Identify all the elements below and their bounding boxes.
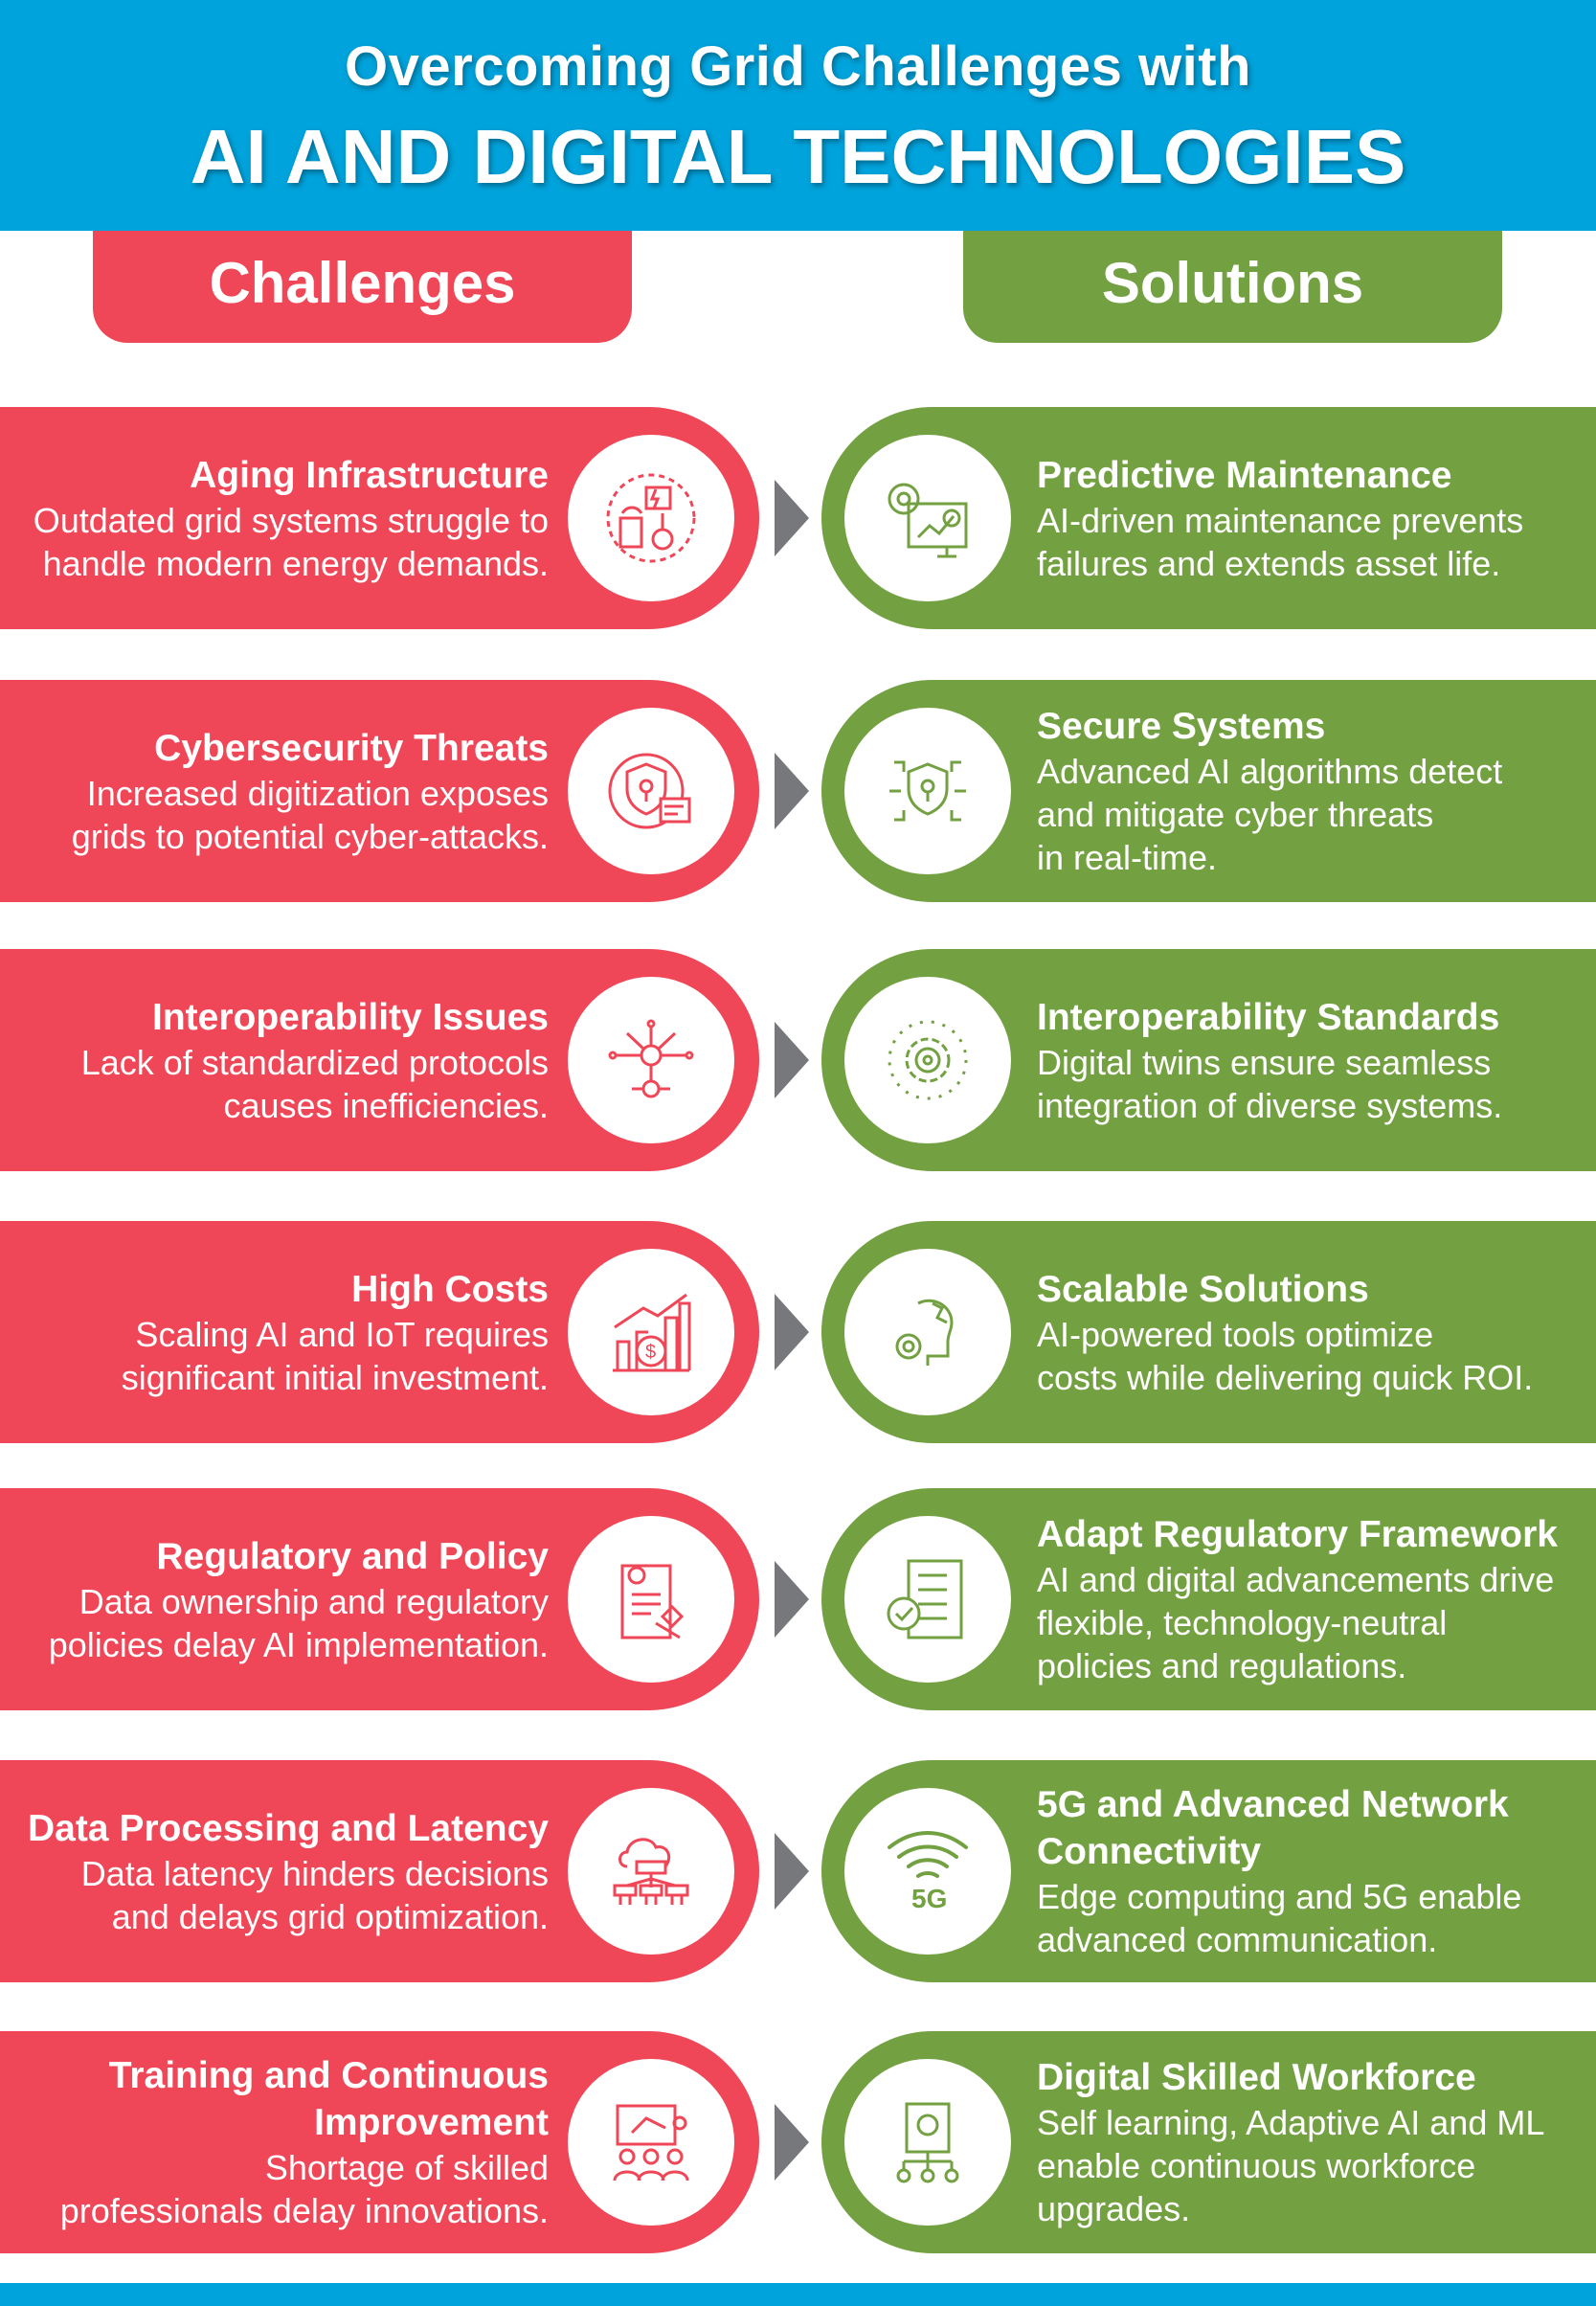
text: digital skilled workforce: Self learning, Adaptive AI and ML — [1037, 2103, 1544, 2142]
text: scalable solutions: costs while delivering quick ROI. — [1037, 1358, 1533, 1396]
text: interoperability standards: Interoperability Standards — [1037, 996, 1499, 1038]
panel: cybersecurity threats — [0, 680, 759, 902]
text: adapt regulatory framework: flexible, technology-neutral — [1037, 1603, 1447, 1642]
arrow — [775, 1022, 809, 1098]
row 4 — [0, 1221, 1596, 1443]
panel: cybersecurity threats: Cybersecurity Threats — [154, 728, 549, 768]
text: adapt regulatory framework: Adapt Regulatory Framework — [1037, 1514, 1558, 1555]
tab: solutions — [963, 231, 1502, 343]
panel: cybersecurity threats: Increased digitization exposes — [87, 774, 549, 812]
text: digital skilled workforce — [1037, 2057, 1544, 2228]
panel: aging infrastructure: Outdated grid systems struggle to — [34, 500, 549, 540]
tab: solutions: Solutions — [1102, 251, 1363, 315]
text: interoperability standards: integration of diverse systems. — [1037, 1086, 1502, 1124]
text: secure systems — [1037, 706, 1502, 877]
text: 5G connectivity: Edge computing and 5G enable — [1037, 1877, 1521, 1916]
panel: high costs: High Costs — [351, 1268, 549, 1310]
text: secure systems: in real-time. — [1037, 838, 1217, 877]
text: 5G connectivity: advanced communication. — [1037, 1920, 1437, 1959]
tab: challenges — [93, 231, 632, 343]
text: predictive maintenance: AI-driven maintenance prevents — [1037, 500, 1523, 540]
panel: scalable solutions — [821, 1221, 1596, 1443]
arrow — [775, 1561, 809, 1638]
panel: secure systems — [821, 680, 1596, 902]
icon: clipboard — [568, 1516, 734, 1683]
row 6 — [0, 1760, 1596, 1982]
text: digital skilled workforce: Digital Skilled Workforce — [1037, 2057, 1476, 2098]
arrow — [775, 1833, 809, 1910]
text: adapt regulatory framework: policies and regulations. — [1037, 1646, 1406, 1685]
text: predictive maintenance: Predictive Maintenance — [1037, 454, 1451, 496]
panel: data processing and latency: Data Processing and Latency — [28, 1808, 549, 1848]
text: interoperability standards — [1037, 996, 1502, 1124]
panel: high costs: significant initial investment. — [122, 1358, 549, 1396]
panel: digital skilled workforce — [821, 2031, 1596, 2253]
row 5 — [0, 1488, 1596, 1710]
panel: aging infrastructure: Aging Infrastructure — [190, 454, 549, 496]
icon: infrastructure — [568, 435, 734, 601]
arrow — [775, 480, 809, 556]
row 1 — [0, 407, 1596, 629]
panel: data processing and latency: Data latency hinders decisions — [81, 1854, 549, 1892]
panel: training: Improvement — [314, 2102, 549, 2143]
header — [0, 0, 1596, 231]
panel: predictive maintenance — [821, 407, 1596, 629]
text: secure systems: Secure Systems — [1037, 706, 1325, 747]
arrow — [775, 2104, 809, 2181]
icon: network — [568, 977, 734, 1143]
tab: challenges: Challenges — [209, 251, 516, 315]
text: secure systems: and mitigate cyber threats — [1037, 795, 1433, 834]
panel: interoperability standards — [821, 949, 1596, 1171]
footer bar — [0, 2283, 1596, 2306]
panel: cybersecurity threats: grids to potential cyber-attacks. — [72, 816, 549, 856]
text: digital skilled workforce: upgrades. — [1037, 2189, 1190, 2228]
icon: cost chart — [568, 1249, 734, 1415]
panel: high costs: Scaling AI and IoT requires — [135, 1314, 549, 1354]
panel: regulatory and policy: policies delay AI implementation. — [49, 1624, 549, 1664]
arrow — [775, 753, 809, 829]
panel: interoperability issues: causes inefficiencies. — [223, 1086, 549, 1124]
text: scalable solutions — [1037, 1268, 1533, 1396]
panel: data processing and latency — [0, 1760, 759, 1982]
text: interoperability standards: Digital twins ensure seamless — [1037, 1042, 1491, 1082]
panel: training — [0, 2031, 759, 2253]
text: 5G connectivity: 5G and Advanced Network — [1037, 1784, 1509, 1825]
panel: regulatory and policy: Data ownership and regulatory — [79, 1582, 549, 1620]
arrow — [775, 1294, 809, 1370]
panel: interoperability issues: Interoperability Issues — [152, 996, 549, 1038]
text: 5G connectivity: Connectivity — [1037, 1831, 1261, 1872]
panel: aging infrastructure — [0, 407, 759, 629]
panel: regulatory and policy: Regulatory and Policy — [156, 1536, 549, 1576]
panel: high costs — [0, 1221, 759, 1443]
panel: adapt regulatory framework — [821, 1488, 1596, 1710]
text: secure systems: Advanced AI algorithms detect — [1037, 752, 1502, 791]
icon: training — [568, 2059, 734, 2226]
panel: 5G — [821, 1760, 1596, 1982]
panel: training: Shortage of skilled — [265, 2148, 549, 2187]
text: predictive maintenance — [1037, 454, 1523, 582]
row 3 — [0, 949, 1596, 1171]
panel: 5G: 5G — [911, 1884, 947, 1913]
icon: cost chart: $ — [645, 1342, 656, 1363]
panel: regulatory and policy — [0, 1488, 759, 1710]
row 7 — [0, 2031, 1596, 2253]
text: 5G connectivity — [1037, 1784, 1521, 1959]
panel: training: Training and Continuous — [109, 2055, 549, 2096]
title line 1: Overcoming Grid Challenges with — [345, 35, 1251, 98]
icon: shield — [568, 708, 734, 874]
icon: cloud network — [568, 1788, 734, 1955]
panel: interoperability issues — [0, 949, 759, 1171]
text: predictive maintenance: failures and extends asset life. — [1037, 544, 1500, 582]
text: scalable solutions: AI-powered tools optimize — [1037, 1314, 1433, 1354]
text: adapt regulatory framework — [1037, 1514, 1558, 1685]
text: digital skilled workforce: enable continuous workforce — [1037, 2146, 1475, 2185]
text: adapt regulatory framework: AI and digital advancements drive — [1037, 1560, 1554, 1599]
title line 2: AI AND DIGITAL TECHNOLOGIES — [191, 114, 1405, 199]
text: scalable solutions: Scalable Solutions — [1037, 1268, 1369, 1310]
row 2 — [0, 680, 1596, 902]
panel: training: professionals delay innovations. — [60, 2191, 549, 2230]
panel: aging infrastructure: handle modern energy demands. — [43, 544, 549, 582]
panel: interoperability issues: Lack of standardized protocols — [81, 1042, 549, 1082]
panel: data processing and latency: and delays grid optimization. — [112, 1896, 549, 1936]
